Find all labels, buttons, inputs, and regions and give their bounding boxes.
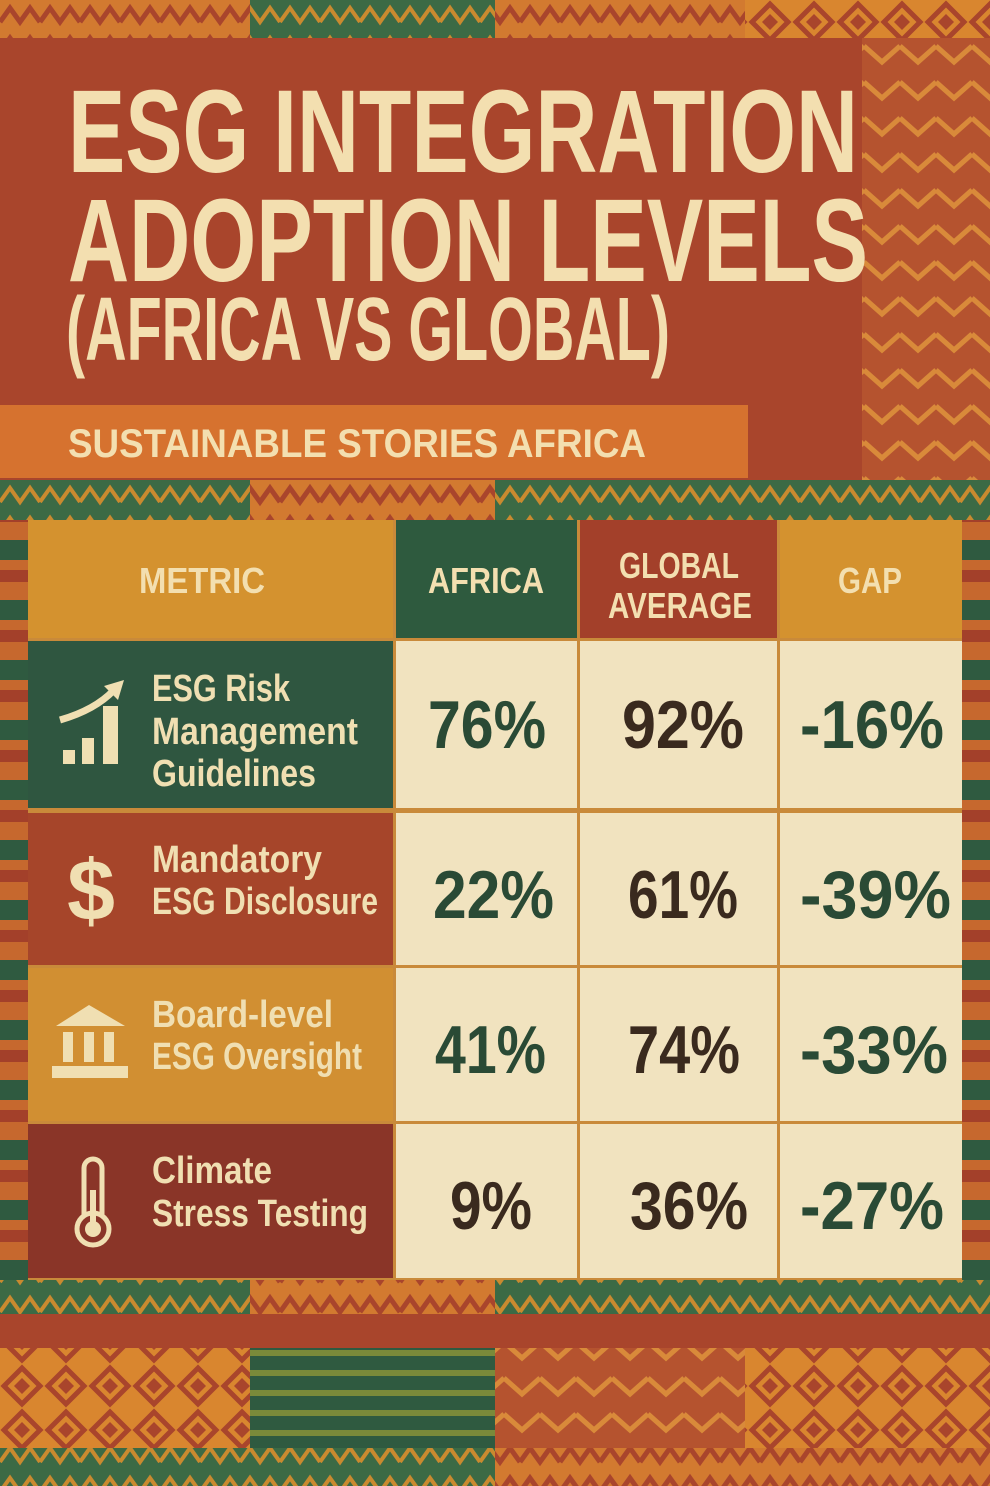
row 4: 9% bbox=[450, 1168, 532, 1244]
row 3: ESG Oversight bbox=[152, 1036, 362, 1078]
title panel bbox=[0, 38, 868, 480]
row 1: Guidelines bbox=[152, 753, 316, 795]
row 2: Mandatory bbox=[152, 839, 322, 881]
row 2: -39% bbox=[800, 857, 951, 933]
row 1: 76% bbox=[428, 687, 546, 763]
row 3: Board-level bbox=[152, 994, 333, 1036]
icon: growth chart bbox=[60, 680, 124, 764]
row 1: Management bbox=[152, 711, 358, 753]
row 4: Climate bbox=[152, 1150, 272, 1192]
header row: METRIC bbox=[139, 560, 265, 601]
header row: GAP bbox=[838, 560, 902, 601]
title: (AFRICA VS GLOBAL) bbox=[66, 280, 670, 380]
row 2: 22% bbox=[433, 857, 554, 933]
row 2: ESG Disclosure bbox=[152, 881, 378, 923]
row 2 bbox=[28, 813, 962, 965]
row 1: -16% bbox=[800, 687, 944, 763]
title bbox=[66, 66, 868, 380]
icon: thermometer bbox=[77, 1159, 109, 1245]
row 4 bbox=[28, 1124, 962, 1278]
row 1: ESG Risk bbox=[152, 668, 291, 710]
row 3: 41% bbox=[435, 1012, 546, 1088]
icon: dollar: $ bbox=[67, 843, 115, 939]
subtitle bar bbox=[0, 405, 748, 478]
row 4: -27% bbox=[800, 1168, 944, 1244]
row 3 bbox=[28, 968, 962, 1121]
row 3: 74% bbox=[628, 1012, 740, 1088]
header row: AFRICA bbox=[428, 560, 544, 601]
table bbox=[28, 520, 962, 1280]
header row bbox=[28, 520, 962, 638]
row 3: -33% bbox=[800, 1012, 948, 1088]
row 2: 61% bbox=[628, 857, 738, 933]
icon: institution bbox=[52, 1005, 128, 1078]
subtitle bar: SUSTAINABLE STORIES AFRICA bbox=[68, 422, 646, 466]
header row: GLOBAL bbox=[619, 545, 739, 586]
row 4: Stress Testing bbox=[152, 1193, 368, 1235]
row 1 bbox=[28, 641, 962, 808]
header row: AVERAGE bbox=[608, 585, 752, 626]
row 4: 36% bbox=[630, 1168, 748, 1244]
row 1: 92% bbox=[622, 687, 744, 763]
